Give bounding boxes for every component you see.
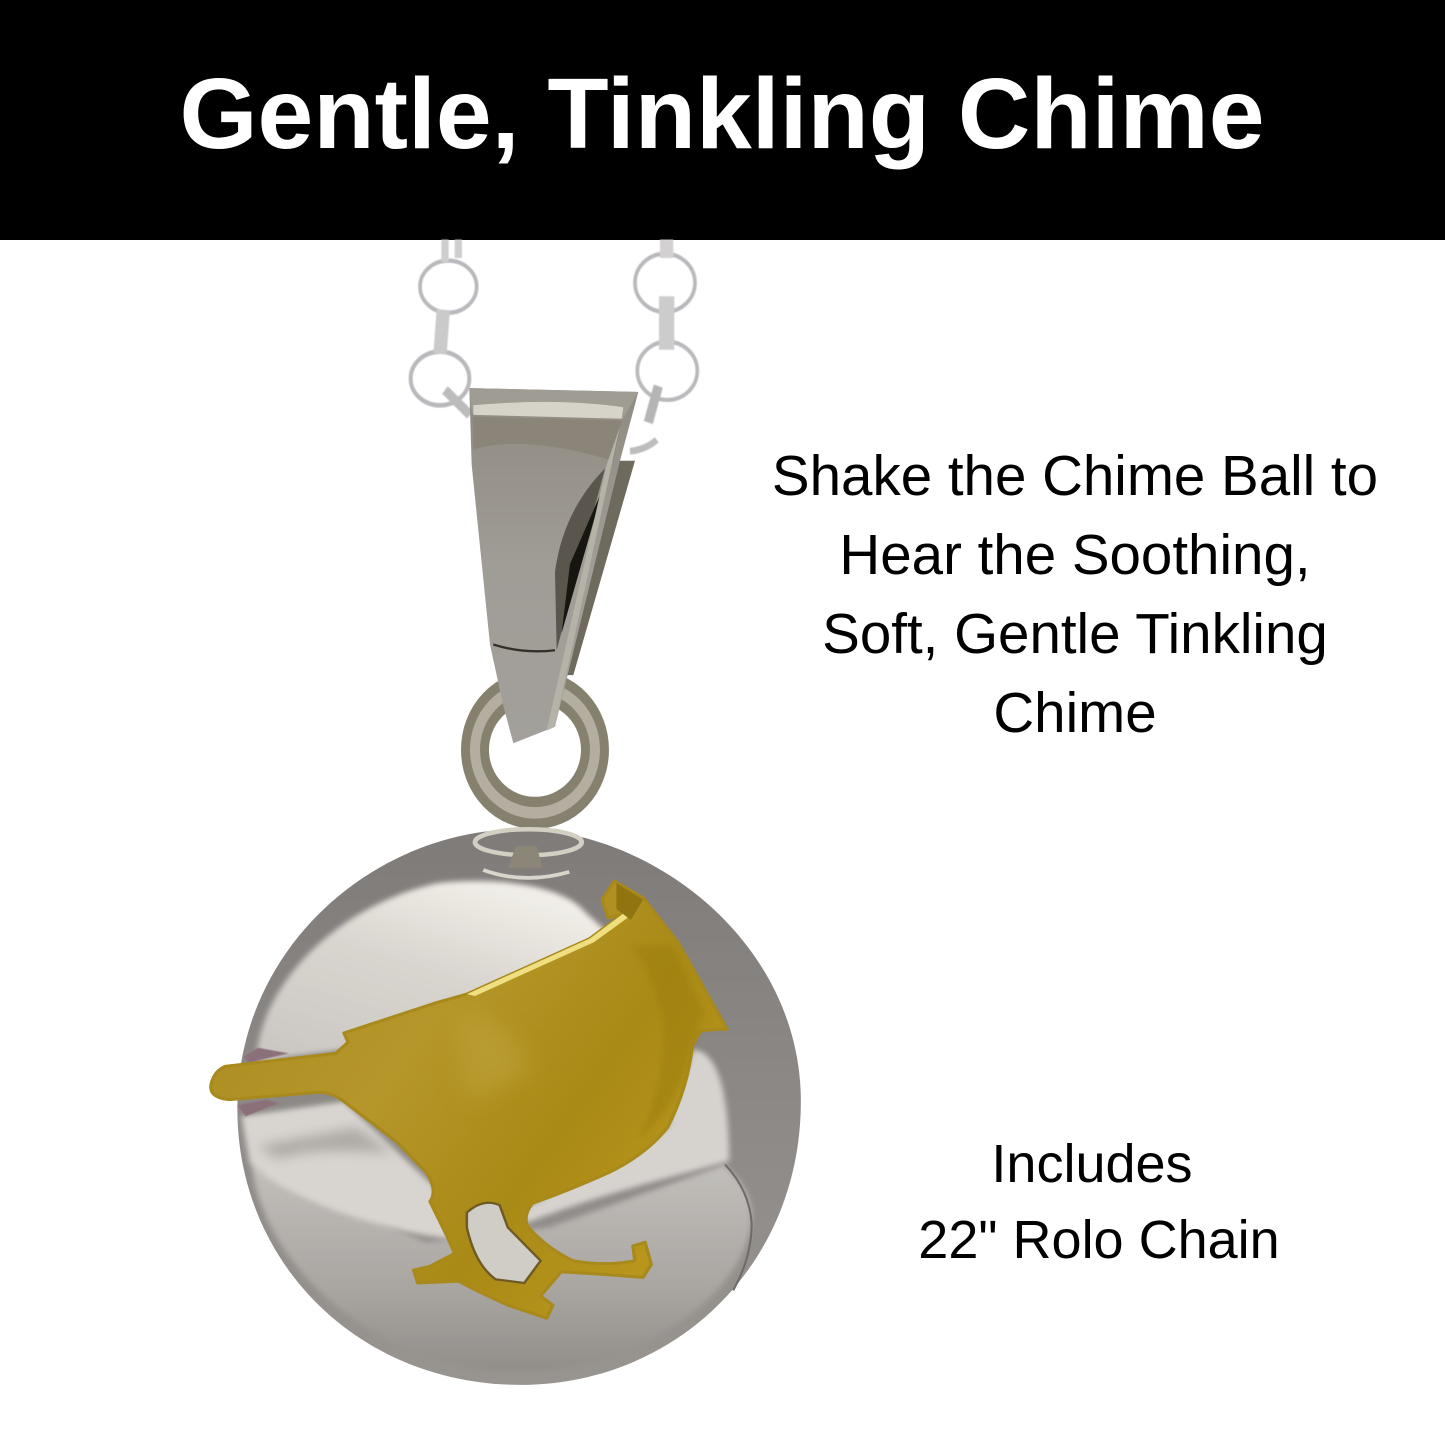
- description text: Chime: [993, 681, 1157, 744]
- bail back strip: [562, 461, 635, 675]
- pendant bail: [469, 388, 638, 743]
- description text: Soft, Gentle Tinkling: [822, 602, 1328, 665]
- beak and tail shadow: [237, 1048, 289, 1116]
- description text: [772, 444, 1378, 744]
- chain note: [918, 1134, 1280, 1270]
- ball top cap: [475, 829, 582, 878]
- lower reflection: [252, 1164, 752, 1372]
- title: Gentle, Tinkling Chime: [180, 58, 1264, 170]
- necklace chain: [411, 240, 697, 451]
- description text: Shake the Chime Ball to: [772, 444, 1378, 507]
- description text: Hear the Soothing,: [839, 523, 1311, 586]
- chain note: 22" Rolo Chain: [918, 1210, 1280, 1270]
- chain note: Includes: [991, 1134, 1193, 1194]
- ball body: [237, 829, 801, 1385]
- bail front: [469, 388, 638, 743]
- bird leg gap: [467, 1203, 541, 1283]
- title banner: [0, 0, 1445, 240]
- jump ring: [475, 687, 595, 813]
- upper highlight: [256, 881, 614, 1064]
- middle band highlight: [241, 1102, 450, 1239]
- ball seam: [725, 1164, 752, 1290]
- bird shading: [459, 1013, 528, 1102]
- chime ball: [211, 829, 801, 1385]
- bird: [211, 881, 727, 1318]
